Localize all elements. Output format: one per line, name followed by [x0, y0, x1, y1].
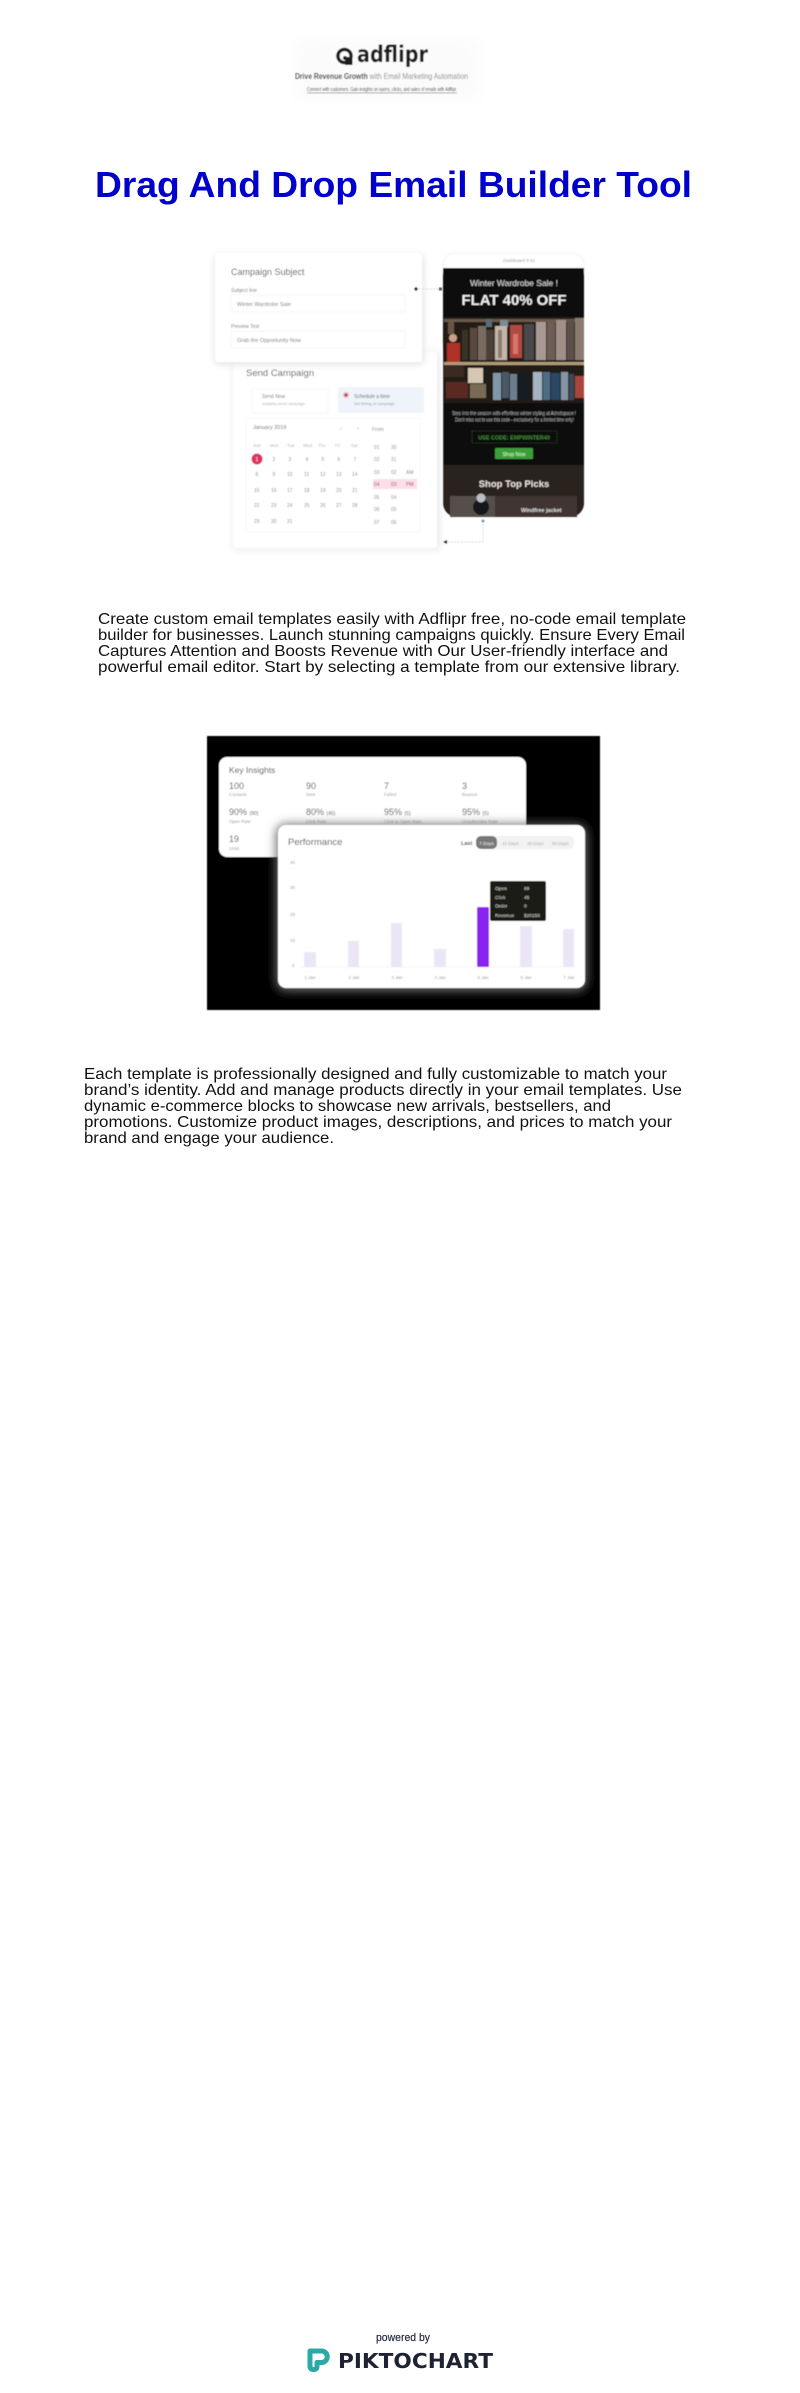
- button: shop now: Shop Now: [502, 452, 526, 458]
- calendar: 27: [336, 503, 342, 509]
- panel: key insights card: 95% (5): [384, 807, 411, 817]
- option: schedule a time: Schedule a time: [354, 394, 390, 400]
- x axis labels: 5 Jan: [477, 975, 489, 980]
- option: send now: Instantly send campaign: [262, 401, 305, 406]
- logo wordmark: adflipr: [357, 42, 429, 68]
- panel: key insights card: Sent: [306, 792, 316, 797]
- calendar: ›: [357, 426, 359, 432]
- x axis labels: 4 Jan: [434, 975, 446, 980]
- panel: performance card: Performance: [288, 837, 342, 848]
- range selector: [461, 836, 574, 849]
- calendar: 7: [354, 457, 356, 463]
- paragraph: templates: dynamic e-commerce blocks to showcase new arrivals, bestsellers, and: [84, 1098, 611, 1115]
- range selector: 90 Days: [552, 841, 569, 846]
- calendar: 23: [271, 503, 277, 509]
- calendar: 15: [254, 488, 260, 494]
- calendar: 12: [320, 472, 326, 478]
- paragraph: templates: Each template is professionally designed and fully customizable to match your: [84, 1066, 668, 1083]
- panel: key insights card: 90: [306, 781, 316, 791]
- time picker: 02: [374, 457, 380, 463]
- calendar: 19: [320, 488, 326, 494]
- calendar: Tue: [287, 443, 295, 448]
- panel: phone email preview: [443, 253, 584, 517]
- field: subject line: [231, 288, 405, 312]
- panel: key insights card: Failed: [384, 792, 397, 797]
- x axis labels: [304, 975, 575, 980]
- panel: performance card: [278, 825, 585, 988]
- panel: key insights card: Bounce: [462, 792, 478, 797]
- email hero: clothing rack photo: [444, 317, 584, 403]
- arrow: subject to preview: [414, 287, 442, 291]
- time picker: 02: [391, 470, 397, 476]
- option: schedule a time: Set timing of campaign: [354, 401, 395, 406]
- panel: key insights card: [219, 757, 526, 857]
- calendar: 2: [272, 457, 276, 463]
- time picker: 01: [374, 445, 380, 451]
- coupon code: [472, 431, 557, 443]
- range selector: Last: [461, 841, 472, 847]
- panel: phone email preview: FLAT 40% OFF: [462, 293, 567, 309]
- field: subject line: Subject line: [231, 288, 257, 294]
- calendar: From: [372, 427, 384, 433]
- tooltip: 45: [524, 895, 530, 901]
- time picker: 05: [374, 495, 380, 501]
- calendar: Mon: [270, 443, 279, 448]
- time picker: 07: [374, 520, 380, 526]
- time picker: AM: [406, 470, 414, 476]
- panel: key insights card: Click Rate: [306, 819, 327, 824]
- logo tagline: Drive Revenue Growth with Email Marketing Automation: [295, 71, 468, 81]
- powered by label: powered by: [376, 2332, 430, 2344]
- calendar: ‹: [340, 426, 342, 432]
- panel: phone email preview: Dashboard 9:41: [503, 258, 536, 263]
- faint logo backdrop: [295, 38, 480, 100]
- calendar: 26: [320, 503, 326, 509]
- time picker: 06: [391, 520, 397, 526]
- paragraph: templates: brand and engage your audience.: [84, 1130, 334, 1147]
- panel: key insights card: Key Insights: [229, 765, 275, 775]
- email body copy: Step into the season with effortless winter styling at Adroitspace !: [452, 411, 576, 417]
- calendar: 22: [254, 503, 260, 509]
- calendar: 9: [272, 472, 276, 478]
- panel: key insights card: 19: [229, 834, 239, 844]
- calendar: January 2019: [253, 425, 286, 431]
- tooltip: Open: [495, 886, 507, 892]
- calendar: 10: [287, 472, 293, 478]
- bar chart: 10: [290, 938, 296, 943]
- time picker: 05: [391, 507, 397, 513]
- panel: key insights card: Units: [229, 846, 240, 851]
- option: send now: [252, 389, 328, 413]
- calendar: 25: [304, 503, 310, 509]
- tooltip: 0: [524, 904, 527, 910]
- panel: key insights card: 7: [384, 781, 389, 791]
- panel: key insights card: Click to Open Rate: [384, 819, 422, 824]
- section: shop top picks: [443, 465, 584, 517]
- field: preview text: [231, 324, 405, 348]
- paragraph: templates: [84, 1066, 682, 1147]
- calendar: 21: [352, 488, 358, 494]
- arrow: preview to schedule: [443, 520, 484, 544]
- panel: analytics dashboard screenshot: [207, 736, 600, 1010]
- panel: email builder illustration: [215, 253, 584, 550]
- option: send now: Send Now: [262, 394, 285, 400]
- panel: key insights card: 80% (45): [306, 807, 336, 817]
- calendar: 13: [336, 472, 342, 478]
- heading: send campaign: Send Campaign: [246, 368, 314, 379]
- calendar: 28: [352, 503, 358, 509]
- tooltip: Order: [495, 904, 508, 910]
- calendar: 6: [338, 457, 340, 463]
- title: Drag And Drop Email Builder Tool: [95, 164, 692, 205]
- range selector: 7 Days: [479, 841, 495, 847]
- option: schedule a time: [338, 387, 424, 413]
- x axis labels: 2 Jan: [348, 975, 360, 980]
- panel: send campaign card: [233, 352, 440, 550]
- calendar: 5: [322, 457, 324, 463]
- calendar: 20: [336, 488, 342, 494]
- calendar: Thu: [318, 443, 326, 448]
- tooltip: Click: [495, 895, 506, 901]
- panel: key insights card: Open Rate: [229, 819, 251, 824]
- time picker: 04: [391, 495, 397, 501]
- x axis labels: 3 Jan: [391, 975, 403, 980]
- paragraph: templates: brand’s identity. Add and manage products directly in your email templates. Use: [84, 1082, 682, 1099]
- panel: key insights card: 90% (90): [229, 807, 259, 817]
- paragraph: intro: powerful email editor. Start by selecting a template from our extensive library.: [98, 659, 680, 676]
- panel: key insights card: 3: [462, 781, 467, 791]
- tooltip: Revenue: [495, 913, 515, 919]
- calendar: 17: [287, 488, 293, 494]
- panel: key insights card: 95% (5): [462, 807, 489, 817]
- bar chart: 30: [290, 885, 296, 890]
- calendar: Sun: [253, 443, 262, 448]
- calendar: 30: [271, 519, 277, 525]
- calendar: 11: [304, 472, 309, 478]
- time picker: 03: [391, 482, 397, 488]
- logo sub-tagline: Connect with customers. Gain insights on opens, clicks, and sales of emails with Adflipr.: [307, 87, 457, 93]
- panel: performance card glow: [276, 824, 587, 991]
- heading: campaign subject: Campaign Subject: [231, 267, 305, 277]
- section: shop top picks: Shop Top Picks: [479, 479, 549, 490]
- bar chart: 20: [290, 912, 296, 917]
- email body copy: [452, 411, 576, 424]
- time picker: 31: [391, 457, 397, 463]
- tooltip: 89: [524, 886, 530, 892]
- time picker: 06: [374, 507, 380, 513]
- paragraph: templates: promotions. Customize product images, descriptions, and prices to match your: [84, 1114, 673, 1131]
- calendar: 14: [352, 472, 358, 478]
- field: subject line: Winter Wardrobe Sale: [237, 302, 291, 308]
- coupon code: USE CODE: EMPWINTER40: [478, 436, 550, 442]
- calendar: 29: [254, 519, 260, 525]
- calendar: Wed: [303, 443, 313, 448]
- panel: campaign subject card: [215, 253, 423, 364]
- panel: key insights card: Contacts: [229, 792, 248, 797]
- calendar: 3: [288, 457, 292, 463]
- footer: powered by piktochart: [310, 2332, 493, 2373]
- x axis labels: 1 Jan: [304, 975, 316, 980]
- bar chart: 0: [292, 963, 295, 968]
- icon: adflipr mark: [338, 49, 352, 65]
- paragraph: intro: [98, 611, 686, 676]
- x axis labels: 6 Jan: [520, 975, 532, 980]
- section: shop top picks: Windfree jacket: [521, 508, 562, 514]
- calendar: 18: [304, 488, 310, 494]
- calendar: 16: [271, 488, 277, 494]
- bar chart: [290, 860, 575, 980]
- icon: piktochart mark: [310, 2351, 327, 2370]
- panel: key insights card: Unsubscribe Rate: [462, 819, 498, 824]
- calendar: Sat: [351, 443, 359, 448]
- calendar: [246, 418, 420, 532]
- piktochart wordmark: PIKTOCHART: [338, 2349, 493, 2373]
- x axis labels: 7 Jan: [563, 975, 575, 980]
- range selector: 15 Days: [502, 841, 519, 846]
- email headline: Winter Wardrobe Sale !: [470, 278, 558, 288]
- time picker: PM: [406, 482, 414, 488]
- calendar: 24: [287, 503, 293, 509]
- calendar: 31: [287, 519, 293, 525]
- time picker: [373, 445, 417, 526]
- panel: key insights card: 100: [229, 781, 244, 791]
- email body copy: Don't miss out to use this code - exclusively for a limited time only!: [455, 418, 574, 424]
- tooltip: $20156: [524, 913, 540, 919]
- time picker: 30: [391, 445, 397, 451]
- time picker: 04: [374, 482, 380, 488]
- time picker: 03: [374, 470, 380, 476]
- paragraph: intro: builder for businesses. Launch stunning campaigns quickly. Ensure Every Email: [98, 627, 685, 644]
- calendar: 8: [256, 472, 258, 478]
- paragraph: intro: Captures Attention and Boosts Revenue with Our User-friendly interface and: [98, 643, 668, 660]
- tooltip: [490, 881, 546, 921]
- button: shop now: [495, 448, 533, 459]
- highlighted bar: [477, 907, 489, 967]
- calendar: 4: [306, 457, 308, 463]
- header logo block: [295, 38, 480, 100]
- field: preview text: Preview Text: [231, 324, 260, 330]
- calendar: Fri: [335, 443, 340, 448]
- range selector: 30 Days: [527, 841, 544, 846]
- calendar: 1: [256, 457, 258, 463]
- paragraph: intro: Create custom email templates easily with Adflipr free, no-code email template: [98, 611, 686, 628]
- bar chart: 40: [290, 860, 296, 865]
- field: preview text: Grab the Opportunity Now: [237, 338, 301, 344]
